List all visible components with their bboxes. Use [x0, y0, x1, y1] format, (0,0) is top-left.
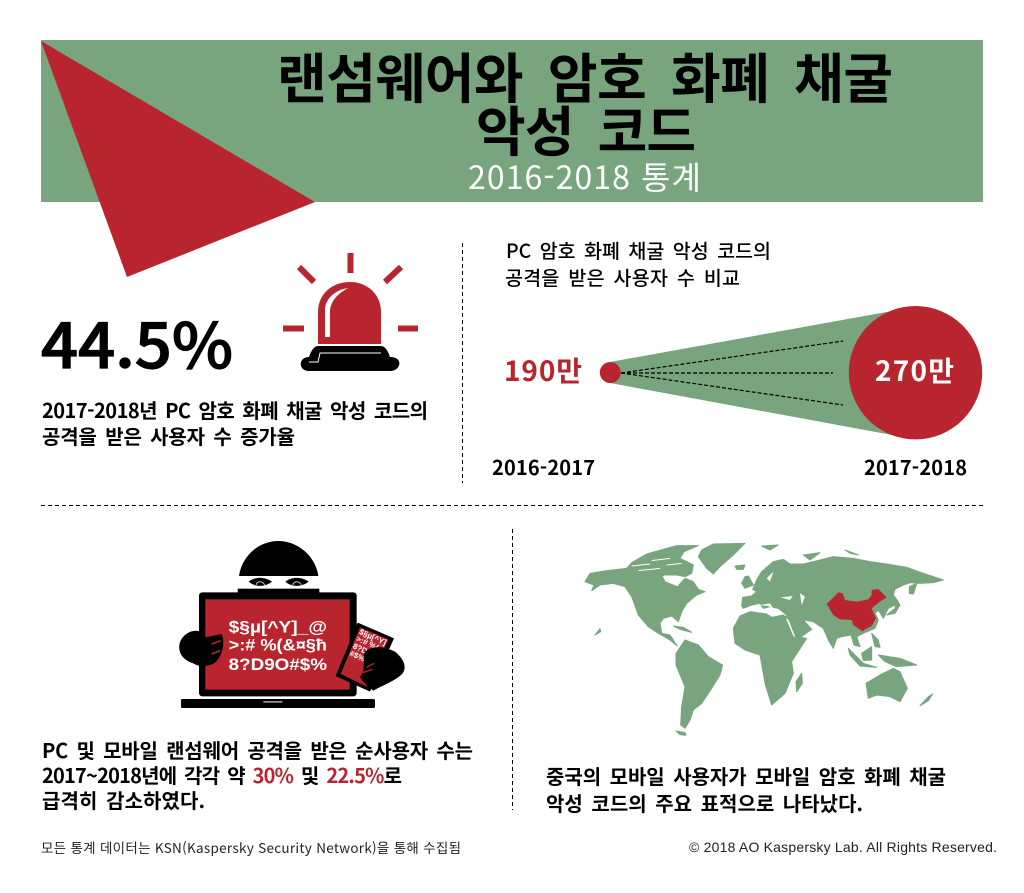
icon: hacker with laptop and phone [179, 541, 405, 708]
heading: PC 암호 화폐 채굴 악성 코드의 [506, 235, 771, 264]
screen text [229, 618, 327, 674]
subtitle: 2016-2018 통계 [468, 153, 701, 199]
dividers [41, 243, 983, 810]
title [277, 35, 893, 167]
panel: China map [546, 543, 946, 817]
value 190만: 190만 [504, 350, 582, 390]
phone: >:# %( [355, 634, 380, 652]
stat 44.5%: 44.5% [41, 296, 233, 386]
China highlight [827, 589, 887, 632]
heading: 공격을 받은 사용자 수 비교 [505, 262, 740, 291]
title: 랜섬웨어와 암호 화폐 채굴 [277, 35, 893, 114]
funnel chart [504, 306, 982, 439]
laptop [199, 592, 357, 696]
screen text: $§µ[^Y]_@ [229, 618, 327, 637]
description: 2017-2018년 PC 암호 화폐 채굴 악성 코드의 [42, 395, 428, 424]
left hand [179, 631, 223, 666]
seas [663, 572, 805, 637]
red triangle [41, 41, 315, 277]
panel: ransomware decrease [42, 541, 473, 814]
screen text: 8?D9O#$% [229, 655, 327, 674]
icon: alarm siren [283, 253, 418, 371]
panel: user comparison [492, 235, 982, 481]
description [546, 761, 946, 817]
description [42, 395, 428, 450]
description: 중국의 모바일 사용자가 모바일 암호 화폐 채굴 [546, 761, 946, 790]
description [42, 735, 473, 814]
screen text: >:# %(&¤§ħ [229, 636, 327, 655]
year labels: 2017-2018 [864, 452, 967, 481]
arctic channels [632, 558, 682, 571]
panel: increase rate [41, 253, 428, 450]
hat [239, 541, 318, 576]
description: PC 및 모바일 랜섬웨어 공격을 받은 순사용자 수는 [42, 735, 473, 764]
title: 악성 코드 [476, 88, 696, 167]
description: 악성 코드의 주요 표적으로 나타났다. [546, 788, 863, 817]
footer: copyright: © 2018 AO Kaspersky Lab. All Rights Reserved. [689, 839, 997, 855]
title banner [41, 35, 983, 277]
value 270만: 270만 [875, 350, 954, 390]
footer: source note: 모든 통계 데이터는 KSN(Kaspersky Security Network)을 통해 수집됨 [41, 837, 461, 857]
description: 2017~2018년에 각각 약 30% 및 22.5%로 [42, 760, 402, 789]
world map [585, 543, 943, 735]
year labels [492, 452, 967, 481]
phone: $§µ[^Y] [358, 627, 388, 647]
phone: #$% [348, 649, 366, 664]
description: 급격히 감소하였다. [42, 785, 205, 814]
description: 공격을 받은 사용자 수 증가율 [42, 421, 295, 450]
heading [505, 235, 771, 291]
year labels: 2016-2017 [492, 452, 595, 481]
phone: 8?D9 [351, 642, 373, 658]
phone [336, 623, 405, 692]
